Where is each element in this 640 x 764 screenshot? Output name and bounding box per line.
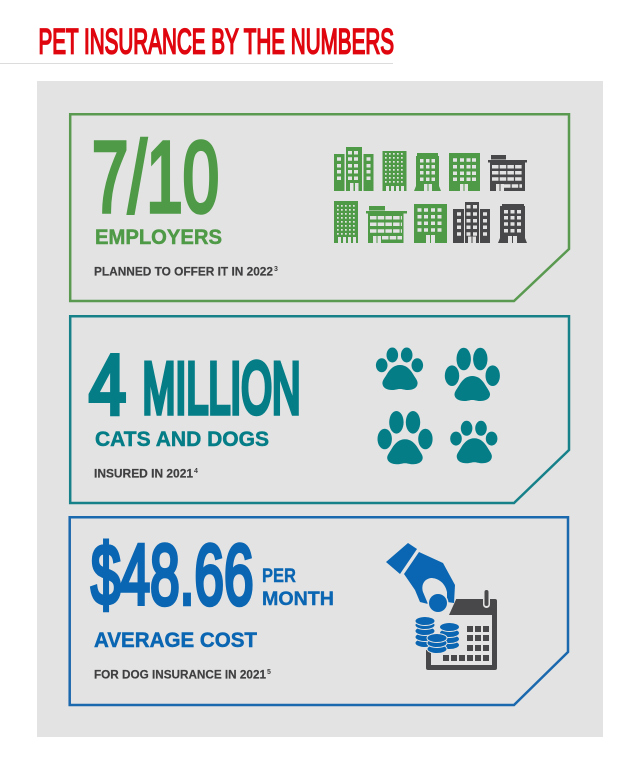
icon: hand xyxy=(386,543,455,614)
panel: cats and dogs xyxy=(70,316,569,503)
label: per month xyxy=(262,565,334,610)
icon: hand, coins and calendar xyxy=(386,543,497,670)
big number: 4 million xyxy=(89,338,300,432)
footnote marker 4: 4 xyxy=(194,468,198,475)
panel: employers xyxy=(70,114,569,301)
icon: calendar xyxy=(420,589,497,670)
grey background panel xyxy=(37,81,603,737)
big number: $48.66: $48.66 xyxy=(91,528,254,623)
big number: 7/10: 7/10 xyxy=(92,122,219,234)
title: PET INSURANCE BY THE NUMBERS xyxy=(38,21,394,61)
panel: average cost xyxy=(70,517,568,705)
caption: planned to offer: PLANNED TO OFFER IT IN 2022 xyxy=(94,264,273,278)
icon: paw prints xyxy=(376,348,500,464)
icon: buildings xyxy=(334,147,527,243)
label: per month: MONTH xyxy=(262,588,334,610)
label: per month: PER xyxy=(262,565,296,587)
caption: insured: INSURED IN 2021 xyxy=(94,466,193,480)
subheading: cats and dogs: CATS AND DOGS xyxy=(95,427,269,451)
icon: paw 2 xyxy=(445,348,500,401)
icon: coin stacks xyxy=(415,616,460,654)
icon: paw 3 xyxy=(378,411,433,464)
icon: paw 1 xyxy=(376,348,423,390)
icon: paw 4 xyxy=(450,421,497,463)
big number: 4 million: MILLION xyxy=(142,349,300,429)
caption: dog insurance: FOR DOG INSURANCE IN 2021 xyxy=(94,668,266,682)
big number: 4 million: 4 xyxy=(89,338,126,432)
subheading: average cost: AVERAGE COST xyxy=(94,628,257,652)
footnote marker 3: 3 xyxy=(274,266,278,273)
footnote marker 5: 5 xyxy=(267,669,271,676)
subheading: employers: EMPLOYERS xyxy=(95,225,222,249)
